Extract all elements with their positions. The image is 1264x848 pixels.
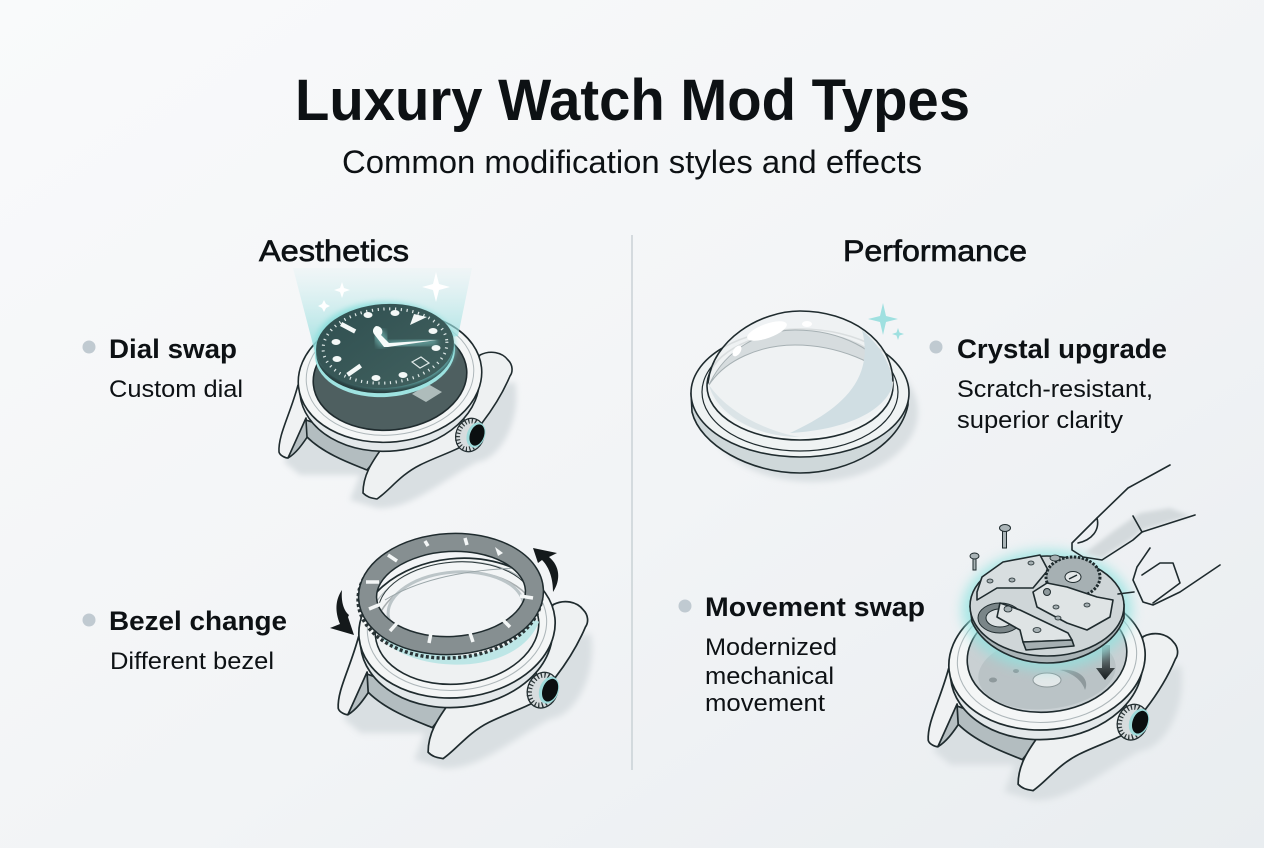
item: Crystal upgrade: superior clarity bbox=[957, 407, 1123, 434]
illustration: dial swap watch bbox=[279, 268, 516, 508]
arrow: insert movement bbox=[1096, 645, 1115, 680]
heading: Aesthetics: Aesthetics bbox=[259, 235, 409, 268]
item: Movement swap bbox=[678, 592, 925, 717]
rotating bezel bbox=[355, 531, 545, 663]
heading: Performance: Performance bbox=[843, 235, 1027, 268]
dial hands bbox=[373, 326, 437, 347]
illustration: crystal dome bbox=[691, 303, 918, 482]
item: Movement swap: Movement swap bbox=[705, 592, 925, 622]
fingers bbox=[1072, 465, 1220, 605]
item: Dial swap: Custom dial bbox=[109, 376, 243, 403]
arrow: rotate clockwise bbox=[533, 548, 558, 592]
sparkles bbox=[318, 272, 450, 312]
crystal bbox=[375, 557, 537, 660]
screws bbox=[970, 524, 1010, 570]
item: Movement swap: mechanical bbox=[705, 663, 834, 690]
mechanical movement bbox=[962, 550, 1134, 670]
item: Crystal upgrade bbox=[930, 334, 1167, 434]
item: Crystal upgrade: Scratch-resistant, bbox=[957, 376, 1153, 403]
illustration: movement swap watch bbox=[928, 465, 1220, 800]
item: Bezel change: Different bezel bbox=[110, 648, 274, 675]
illustration: bezel change watch bbox=[330, 531, 592, 768]
arrow: rotate counter-clockwise bbox=[330, 590, 354, 635]
item: Crystal upgrade: Crystal upgrade bbox=[957, 334, 1167, 364]
subtitle: Common modification styles and effects bbox=[342, 144, 922, 180]
dial markers bbox=[332, 310, 440, 381]
sparkles bbox=[868, 303, 904, 340]
item: Movement swap: movement bbox=[705, 690, 825, 717]
item: Dial swap bbox=[82, 334, 243, 403]
title: Luxury Watch Mod Types bbox=[295, 68, 970, 133]
item: Bezel change: Bezel change bbox=[109, 606, 287, 636]
item: Movement swap: Modernized bbox=[705, 634, 837, 661]
item: Bezel change bbox=[82, 606, 287, 675]
item: Dial swap: Dial swap bbox=[109, 334, 237, 364]
